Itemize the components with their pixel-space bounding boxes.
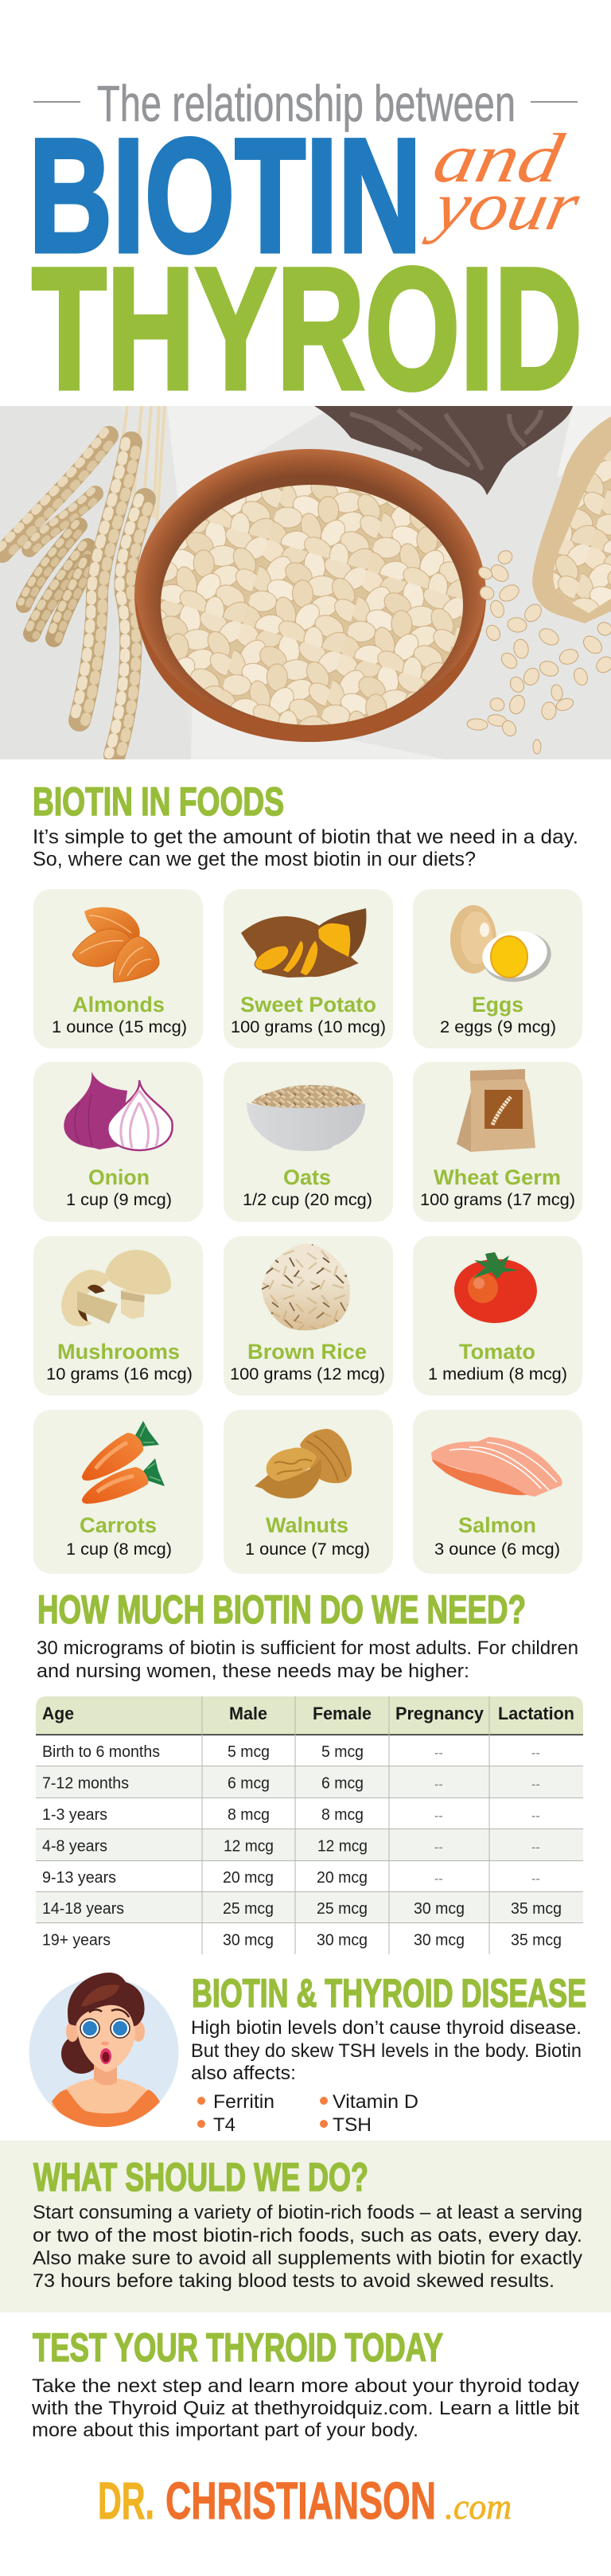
amount: tomato: 1 medium (8 mcg) (428, 1365, 567, 1384)
table header: Female (313, 1704, 372, 1723)
row: birth to 6 months: -- (531, 1747, 540, 1760)
amount: onion: 1 cup (9 mcg) (66, 1191, 172, 1209)
name: walnuts: Walnuts (266, 1513, 348, 1537)
row: 1-3 years: 8 mcg (321, 1806, 364, 1824)
row: 9-13 years: 20 mcg (223, 1869, 274, 1887)
script words: and your: your (421, 168, 586, 245)
row: 19+ years (42, 1931, 562, 1949)
row: 19+ years: 30 mcg (223, 1931, 274, 1949)
table header: Pregnancy (395, 1704, 485, 1723)
name: tomato: Tomato (459, 1340, 535, 1364)
text block: But they do skew TSH levels in the body. Biotin (191, 2040, 582, 2062)
name: eggs: Eggs (472, 993, 523, 1017)
table header: Lactation (498, 1704, 574, 1723)
icon: salmon (431, 1437, 562, 1497)
icon: brown rice pile (262, 1243, 350, 1330)
row: 4-8 years: -- (531, 1840, 540, 1855)
row: birth to 6 months (42, 1743, 540, 1761)
script words: and your: and (427, 120, 570, 197)
bowl (134, 449, 486, 742)
card: carrots (33, 1410, 203, 1574)
row: 19+ years: 30 mcg (414, 1931, 465, 1949)
icon: onion (64, 1071, 173, 1150)
icon: almonds (72, 907, 159, 982)
intro text: and nursing women, these needs may be higher: (37, 1661, 469, 1682)
icon: tomato (454, 1252, 537, 1323)
row: birth to 6 months: 5 mcg (228, 1743, 270, 1761)
amount: sweet potato: 100 grams (10 mcg) (231, 1018, 386, 1036)
amount: eggs: 2 eggs (9 mcg) (440, 1018, 556, 1036)
intro text: It’s simple to get the amount of biotin that we need in a day. (33, 826, 578, 849)
intro text: So, where can we get the most biotin in our diets? (33, 849, 476, 871)
row: 19+ years: 19+ years (42, 1931, 111, 1949)
text block: 73 hours before taking blood tests to avoid skewed results. (33, 2270, 555, 2292)
name: salmon: Salmon (458, 1513, 536, 1537)
row: 14-18 years: 25 mcg (223, 1900, 274, 1918)
text block (31, 2375, 579, 2441)
panel: biotin in foods (33, 779, 582, 1574)
card: oats (224, 1062, 393, 1222)
text block: more about this important part of your body. (32, 2420, 418, 2441)
icon: surprised woman (29, 1973, 178, 2127)
card: walnuts (224, 1410, 393, 1574)
icon: mushrooms (61, 1250, 171, 1326)
text block: Start consuming a variety of biotin-rich foods – at least a serving (33, 2202, 582, 2223)
cloth (314, 406, 573, 495)
row: 7-12 months: 6 mcg (321, 1775, 364, 1793)
text block (33, 2202, 582, 2292)
card: almonds (33, 889, 203, 1048)
amount: wheat germ: 100 grams (17 mcg) (420, 1191, 575, 1209)
panel: test your thyroid today (31, 2325, 579, 2441)
card: wheat germ (413, 1062, 582, 1222)
panel: how much biotin do we need (36, 1587, 583, 1954)
bullet list (197, 2091, 418, 2136)
icon: sweet potato (241, 908, 366, 978)
script words: and your (421, 120, 586, 245)
table header (36, 1696, 583, 1735)
row: 4-8 years: 4-8 years (42, 1837, 107, 1855)
wheat ears (0, 431, 150, 755)
card: brown rice (224, 1236, 393, 1395)
logo: dr christianson: .com (445, 2486, 512, 2527)
scattered oats (466, 548, 611, 754)
intro text: 30 micrograms of biotin is sufficient for most adults. For children (37, 1637, 578, 1659)
panel: what should we do (0, 2141, 611, 2313)
row: 14-18 years: 25 mcg (317, 1900, 368, 1918)
card: salmon (413, 1410, 582, 1574)
row: 19+ years: 35 mcg (511, 1931, 562, 1949)
row: 9-13 years: -- (531, 1872, 540, 1886)
row: 1-3 years: 8 mcg (228, 1806, 270, 1824)
row: 9-13 years: 20 mcg (317, 1869, 368, 1887)
row: 1-3 years (42, 1806, 540, 1824)
heading: biotin in foods: BIOTIN IN FOODS (33, 779, 284, 824)
row: 4-8 years: 12 mcg (317, 1837, 368, 1855)
row: 7-12 months: -- (531, 1778, 540, 1791)
oats in bowl (161, 485, 463, 725)
bullet list: Ferritin (213, 2091, 274, 2113)
name: sweet potato: Sweet Potato (240, 993, 376, 1017)
icon: eggs (450, 905, 555, 987)
card: sweet potato (224, 889, 393, 1048)
amount: brown rice: 100 grams (12 mcg) (230, 1365, 385, 1384)
heading: test your thyroid today: TEST YOUR THYROID TODAY (33, 2325, 443, 2370)
row: 9-13 years: 9-13 years (42, 1869, 116, 1887)
row: 9-13 years (42, 1869, 540, 1887)
name: wheat germ: Wheat Germ (434, 1165, 561, 1189)
icon: carrots (82, 1421, 165, 1504)
scoop (532, 416, 611, 623)
row: 14-18 years: 14-18 years (42, 1900, 124, 1918)
row: 14-18 years: 35 mcg (511, 1900, 562, 1918)
text block (191, 2017, 582, 2084)
intro text (37, 1637, 578, 1682)
row: 7-12 months (42, 1775, 540, 1793)
row: birth to 6 months: Birth to 6 months (42, 1743, 160, 1761)
photo: bowl of oats with wheat (0, 406, 611, 759)
row: 14-18 years (42, 1900, 562, 1918)
row: 1-3 years: -- (434, 1809, 443, 1823)
name: carrots: Carrots (80, 1513, 157, 1537)
text block: or two of the most biotin-rich foods, such as oats, every day. (33, 2225, 582, 2246)
row: birth to 6 months: -- (434, 1747, 443, 1760)
name: oats: Oats (283, 1165, 331, 1189)
row: 14-18 years: 30 mcg (414, 1900, 465, 1918)
wheat stems (119, 406, 165, 525)
row: 7-12 months: -- (434, 1778, 443, 1791)
card: onion (33, 1062, 203, 1222)
bullet list: TSH (333, 2114, 372, 2136)
row: 1-3 years: 1-3 years (42, 1806, 107, 1824)
text block: Take the next step and learn more about your thyroid today (32, 2375, 579, 2397)
bullet list: Vitamin D (333, 2091, 418, 2113)
bullet list: T4 (213, 2114, 235, 2136)
row: 19+ years: 30 mcg (317, 1931, 368, 1949)
icon: wheat germ bag (457, 1069, 535, 1152)
row: birth to 6 months: 5 mcg (321, 1743, 364, 1761)
intro text (33, 826, 578, 871)
amount: salmon: 3 ounce (6 mcg) (434, 1540, 560, 1559)
text block: Also make sure to avoid all supplements with biotin for exactly (33, 2248, 582, 2269)
row: 4-8 years (42, 1837, 540, 1855)
table: biotin needs by age (36, 1696, 583, 1954)
name: brown rice: Brown Rice (247, 1340, 367, 1364)
icon: oats bowl (247, 1085, 365, 1151)
name: onion: Onion (88, 1165, 150, 1189)
icon: walnuts (255, 1429, 352, 1498)
name: almonds: Almonds (72, 993, 165, 1017)
row: 7-12 months: 7-12 months (42, 1775, 129, 1793)
row: 4-8 years: -- (434, 1840, 443, 1855)
row: 1-3 years: -- (531, 1809, 540, 1823)
heading: what should we do: WHAT SHOULD WE DO? (33, 2155, 368, 2199)
card: tomato (413, 1236, 582, 1395)
row: 9-13 years: -- (434, 1872, 443, 1886)
row: 7-12 months: 6 mcg (228, 1775, 270, 1793)
amount: carrots: 1 cup (8 mcg) (66, 1540, 172, 1559)
text block: High biotin levels don’t cause thyroid disease. (191, 2017, 582, 2039)
text block: with the Thyroid Quiz at thethyroidquiz.com. Learn a little bit (31, 2398, 579, 2419)
table header: Age (42, 1704, 74, 1723)
text block: also affects: (191, 2063, 296, 2084)
panel: biotin and thyroid disease (29, 1973, 586, 2131)
table header: Male (229, 1704, 267, 1723)
amount: almonds: 1 ounce (15 mcg) (52, 1018, 187, 1036)
card: mushrooms (33, 1236, 203, 1395)
heading word: BIOTIN: BIOTIN (29, 105, 422, 287)
amount: walnuts: 1 ounce (7 mcg) (245, 1540, 370, 1559)
title (29, 75, 586, 426)
name: mushrooms: Mushrooms (57, 1340, 180, 1364)
row: 4-8 years: 12 mcg (224, 1837, 274, 1855)
card: eggs (413, 889, 582, 1048)
logo: dr christianson: CHRISTIANSON (165, 2471, 436, 2530)
logo: dr christianson: DR. (98, 2471, 154, 2530)
amount: oats: 1/2 cup (20 mcg) (243, 1191, 372, 1209)
amount: mushrooms: 10 grams (16 mcg) (46, 1365, 193, 1384)
